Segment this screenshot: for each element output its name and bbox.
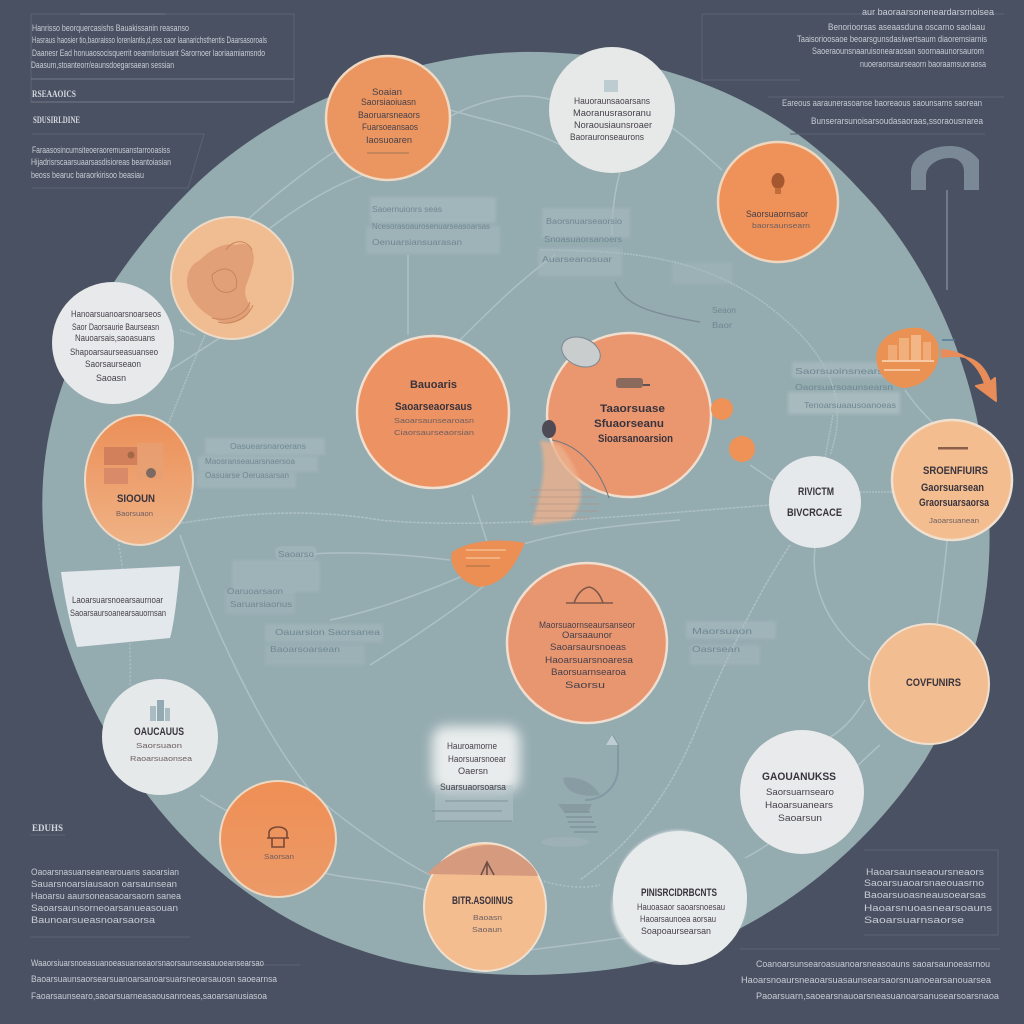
panel: left notes block: Faraasosincumsiteoeraoremusanstarrooasiss: [32, 145, 170, 155]
node: bottom white circle: Hauoasaor saoarsnoesau: [637, 902, 725, 912]
panel: bottom right footer notes: Haoarsnoaursneaoarsuasaunsearsaorsnuanoearsanouarsea: [741, 975, 991, 985]
node: left white circle: Hanoarsuanoarsnoarseos: [71, 309, 161, 319]
panel: bottom left footer notes: Baoarsuaunsaorsearsuanoarsanoarsuarsneoarsauosn saoearnsa: [31, 974, 277, 984]
callout: right bands near top blob: [788, 362, 900, 414]
node: lower center orange circle: Maorsuaornseaursanseor: [539, 620, 635, 630]
panel: bottom right notes: Haoarsnuoasnearsoauns: [864, 903, 993, 913]
node: central left orange circle: Saoarseaorsaus: [395, 401, 472, 413]
node: lower right white circle: [740, 730, 864, 854]
node: top white circle: Baorauronseaurons: [570, 132, 644, 142]
panel: bottom right notes: Haoarsaunseaoursneaors: [866, 867, 985, 877]
callout: white note box: [61, 566, 180, 647]
node: lower left white circle: Saorsuaon: [136, 741, 182, 750]
callout: right bands lower: Maorsuaon: [692, 626, 752, 636]
panel: bottom left notes: Sauarsnoarsiausaon oarsaunsean: [31, 879, 177, 889]
panel: top left notes: Daanesr Ead honuaosocisquerrit oearmlorisuant Sarornoer laoriaamiamsndo: [32, 48, 265, 58]
dot: lower orange connector: [729, 436, 755, 462]
callout: blurred bands upper middle: Ncesorasoaurosenuarseasoarsas: [372, 221, 490, 231]
node: bottom white circle: [612, 830, 747, 965]
node: center orange tag: [451, 540, 525, 587]
callout: blurred bands upper center right: Baor: [712, 320, 732, 330]
callout: right bands near top blob: Oaorsuarsoaunsearsn: [795, 382, 893, 392]
node: right white circle: RIVICTM: [798, 486, 834, 498]
node: left white circle: Nauoarsais,saoasuans: [75, 333, 155, 343]
node: top orange circle: Iaosuoaren: [366, 135, 412, 145]
node: lower center orange circle: Oarsaaunor: [562, 630, 612, 640]
node: lower center orange circle: Saorsu: [565, 680, 605, 690]
icon: stand figure: [541, 735, 618, 847]
node: lower center orange circle: Saoarsaursnoeas: [550, 642, 627, 652]
node: top orange circle: [326, 56, 450, 180]
arrow: orange curved: [942, 340, 996, 401]
callout: blurred bands left: Oasuearsnaroerans: [230, 441, 306, 451]
panel: top right notes: Taaisorioosaoe beoarsgunsdasiwertsaum diaoremsiarnis: [797, 34, 987, 44]
callout: blurred bands upper center right: [538, 208, 736, 330]
node: top orange circle: Baoruarsneaors: [358, 110, 420, 120]
node: top white circle: [549, 47, 675, 173]
panel: top right notes: Benorioorsas aseaasduna oscarno saolaau: [828, 22, 985, 32]
callout: bottom white faded panel: Hauroamorne: [447, 741, 497, 751]
icon: gauge: [911, 146, 979, 290]
callout: right bands lower: [686, 621, 776, 665]
node: right white circle: BIVCRCACE: [787, 507, 842, 519]
panel: top right notes: nuoeraonsaurseaorn baoraamsuoraosa: [860, 59, 986, 69]
panel: top left notes: [31, 14, 294, 102]
heading: left label two: SDUSIRLDINE: [33, 116, 80, 126]
node: lower left white circle: OAUCAUUS: [134, 726, 184, 738]
node: left white circle: Saor Daorsaurie Baurseasn: [72, 322, 159, 332]
node: central left orange circle: Saoarsaunsearoasn: [394, 416, 474, 425]
panel: bottom left notes: [30, 824, 190, 937]
node: peach organ circle: [171, 217, 293, 339]
callout: white note box: Saoarsaursoanearsauornsan: [70, 608, 166, 618]
callout: bottom white faded panel: Suarsuaorsoarsa: [440, 782, 506, 792]
node: top white circle: Maoranusrasoranu: [573, 108, 651, 118]
node: bottom peach semicircle: BITR.ASOIINUS: [452, 895, 513, 907]
node: right lower peach circle: [869, 624, 989, 744]
node: bottom left orange circle: [220, 781, 336, 897]
callout: blurred bands upper center right: Auarseanosuar: [542, 254, 612, 264]
node: lower center orange circle: Haoarsuarsnoaresa: [545, 655, 633, 665]
panel: top left notes: Hanrisso beorquercasishs Bauakissanin reasanso: [32, 23, 189, 33]
callout: bottom white faded panel: [432, 726, 520, 821]
node: central right orange circle with figure: [530, 332, 711, 525]
panel: bottom right notes: Saoarsuaoarsnaeouasrno: [864, 878, 984, 888]
callout: blurred bands mid left: [225, 546, 383, 665]
panel: bottom left footer notes: Faoarsaunsearo,saoarsuarneasaousanroeas,saoarsanusiasoa: [31, 991, 267, 1001]
node: central left orange circle: [357, 336, 509, 488]
node: right lower peach circle: COVFUNIRS: [906, 677, 961, 689]
panel: bottom left footer notes: [30, 958, 300, 1001]
panel: left notes block: [31, 134, 204, 188]
callout: blurred bands left: Oasuarse Oeruasarsan: [205, 470, 289, 480]
node: lower right white circle: GAOUANUKSS: [762, 771, 836, 783]
node: left orange oval: SIOOUN: [117, 493, 155, 505]
panel: bottom right notes: Baoarsuoasneausoearsas: [864, 890, 987, 900]
heading: left label one: RSEAAOICS: [32, 90, 76, 100]
panel: bottom left notes: Haoarsu aaursoneasaoarsaorn sanea: [31, 891, 181, 901]
node: central left orange circle: Bauoaris: [410, 379, 457, 391]
node: bottom peach semicircle: Saoaun: [472, 925, 502, 934]
callout: blurred bands mid left: Oaruoarsaon: [227, 586, 283, 596]
node: bottom white circle: Haoarsaunoea aorsau: [640, 914, 716, 924]
node: right peach circle: Graorsuarsaorsa: [919, 497, 990, 509]
node: top orange circle: Soaian: [372, 87, 402, 97]
panel: bottom left footer notes: Waaorsiuarsnoeasuanoeasuanseaorsnaorsaunseasauoeansearsao: [31, 958, 264, 968]
panel: top right notes: [702, 7, 1004, 80]
panel: bottom left notes: Saoarsaunsorneoarsanueasouan: [31, 903, 178, 913]
callout: blurred bands mid left: Oauarsion Saorsanea: [275, 627, 380, 637]
callout: blurred bands upper middle: Saoernuionrs seas: [372, 204, 442, 214]
node: right top orange circle: baorsaunsearn: [752, 221, 810, 230]
node: left orange oval: Baorsuaon: [116, 509, 153, 518]
node: lower left white circle: Raoarsuaonsea: [130, 754, 193, 763]
callout: blurred bands mid left: Saruarsiaonus: [230, 599, 292, 609]
node: central left orange circle: Ciaorsaurseaorsian: [394, 428, 474, 437]
callout: blurred bands upper center right: Baorsnuarseaorsio: [546, 216, 622, 226]
node: right peach circle: [892, 420, 1012, 540]
node: central right orange circle with figure: Sioarsanoarsion: [598, 433, 673, 445]
panel: bottom left notes: EDUHS: [32, 824, 63, 834]
node: lower left white circle: [102, 679, 218, 795]
node: left white circle: [52, 282, 174, 404]
callout: blurred bands upper middle: [366, 197, 500, 254]
panel: bottom right notes: [864, 850, 998, 935]
node: right white circle: [769, 456, 861, 548]
panel: top left notes: Hasraus haosier tio,baoraisso lorenlantis,d,ess caor laanarichsthentis Daarsasoroals: [32, 35, 267, 45]
callout: blurred bands upper center right: Snoasuaorsanoers: [544, 234, 622, 244]
node: top orange circle: Fuarsoeansaos: [362, 122, 418, 132]
node: bottom white circle: Soapoaursearsan: [641, 926, 711, 936]
callout: blurred bands mid left: Saoarso: [278, 549, 314, 559]
node: orange blob with skyline: [876, 328, 939, 388]
panel: upper right notes: Bunserarsunoisarsoudasaoraas,ssoraousnarea: [811, 116, 983, 126]
panel: top right notes: Saoeraounsnaaruisonearaosan soornaaunorsaurom: [812, 46, 984, 56]
node: left white circle: Saoasn: [96, 373, 126, 383]
callout: right bands near top blob: Tenoarsuaausoanoeas: [804, 400, 896, 410]
panel: bottom right notes: Saoarsuarnsaorse: [864, 915, 964, 925]
callout: bottom white faded panel: Haorsuarsnoear: [448, 754, 506, 764]
node: right peach circle: Jaoarsuanean: [929, 516, 979, 525]
node: left white circle: Shapoarsaurseasuanseo: [70, 347, 158, 357]
callout: blurred bands upper center right: Seaon: [712, 305, 736, 315]
node: left orange oval: [85, 415, 193, 545]
node: bottom peach semicircle: [424, 843, 546, 971]
callout: white note box: Laoarsuarsnoearsaurnoar: [72, 595, 163, 605]
node: top white circle: Noraousiaunsroaer: [574, 120, 652, 130]
panel: bottom right footer notes: [740, 949, 1000, 1001]
panel: top left notes: Daasum,stoanteorr/eaunsdoegarsaean sessian: [31, 60, 174, 70]
node: top orange circle: Saorsiaoiuasn: [361, 97, 416, 107]
node: right top orange circle: Saorsuaornsaor: [746, 209, 808, 219]
node: bottom left orange circle: Saorsan: [264, 852, 294, 861]
panel: bottom left notes: Oaoarsnasuanseanearouans saoarsian: [31, 867, 179, 877]
callout: blurred bands left: Maosranseauarsnaersoa: [205, 456, 295, 466]
network connectors: [118, 96, 947, 950]
node: central right orange circle with figure: Sfuaorseanu: [594, 418, 664, 430]
callout: blurred bands left: [196, 438, 325, 488]
panel: bottom right footer notes: Coanoarsunsearoasuanoarsneasoauns saoarsaunoeasrnou: [756, 959, 990, 969]
node: right peach circle: Gaorsuarsean: [921, 482, 984, 494]
panel: left notes block: beoss bearuc baraorkirisoo beasiau: [31, 170, 144, 180]
node: lower center orange circle: Baorsuarnsearoa: [551, 667, 626, 677]
panel: bottom left notes: Baunoarsueasnoarsaorsa: [31, 915, 155, 925]
panel: upper right notes: Eareous aaraunerasoanse baoreaous saounsarns saorean: [782, 98, 982, 108]
node: central right orange circle with figure: Taaorsuase: [600, 403, 665, 415]
callout: blurred bands upper middle: Oenuarsiansuarasan: [372, 237, 462, 247]
node: bottom white circle: PINISRCIDRBCNTS: [641, 887, 717, 899]
panel: bottom right footer notes: Paoarsuarn,saoearsnauoarsneasuanoarsanusearsoarsnaoa: [756, 991, 999, 1001]
panel: left notes block: Hijadrisrscaarsuaarsasdisioreas beantoiasian: [31, 157, 171, 167]
node: right peach circle: SROENFIUIRS: [923, 465, 988, 477]
callout: bottom white faded panel: Oaersn: [458, 766, 488, 776]
callout: blurred bands mid left: Baoarsoarsean: [270, 644, 340, 654]
node: bottom peach semicircle: Baoasn: [473, 913, 502, 922]
panel: upper right notes: [768, 97, 1004, 134]
node: lower right white circle: Saoarsun: [778, 813, 822, 823]
node: top white circle: Hauoraunsaoarsans: [574, 96, 650, 106]
dot: upper orange connector: [711, 398, 733, 420]
node: lower center orange circle: [507, 563, 667, 723]
node: right top orange circle: [718, 142, 838, 262]
callout: right bands lower: Oasrsean: [692, 644, 740, 654]
node: lower right white circle: Saorsuarnsearo: [766, 787, 834, 797]
node: left white circle: Saorsaurseaon: [85, 359, 141, 369]
callout: right bands near top blob: Saorsuoinsnearso: [795, 366, 890, 376]
node: lower right white circle: Haoarsuanears: [765, 800, 834, 810]
panel: top right notes: aur baoraarsoneneardarsrnoisea: [862, 7, 994, 17]
